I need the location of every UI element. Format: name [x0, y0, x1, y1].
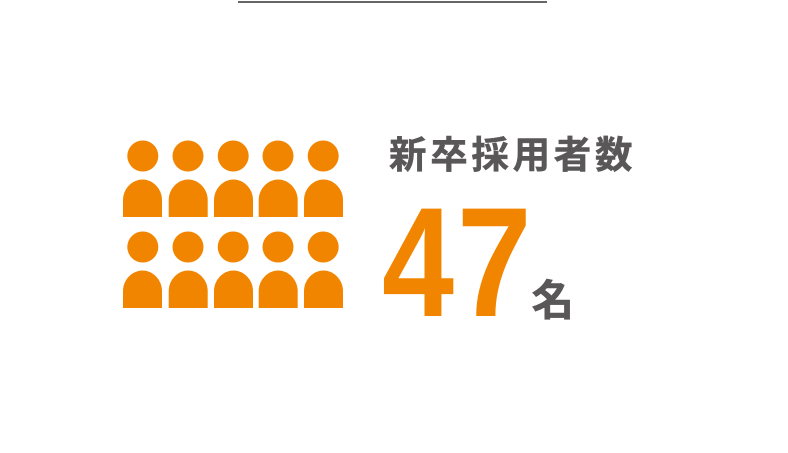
number: 47: 4 [382, 176, 454, 350]
unit: people: 名 [532, 278, 574, 326]
icon: person row 1 [123, 140, 343, 217]
heading: new graduate hires: 新卒採用者数 [389, 134, 636, 176]
top divider line [238, 1, 547, 3]
number: 47: 7 [457, 174, 532, 349]
icon: grid of ten people [123, 140, 343, 308]
number: 47 [382, 174, 532, 350]
icon: person row 2 [123, 232, 343, 308]
